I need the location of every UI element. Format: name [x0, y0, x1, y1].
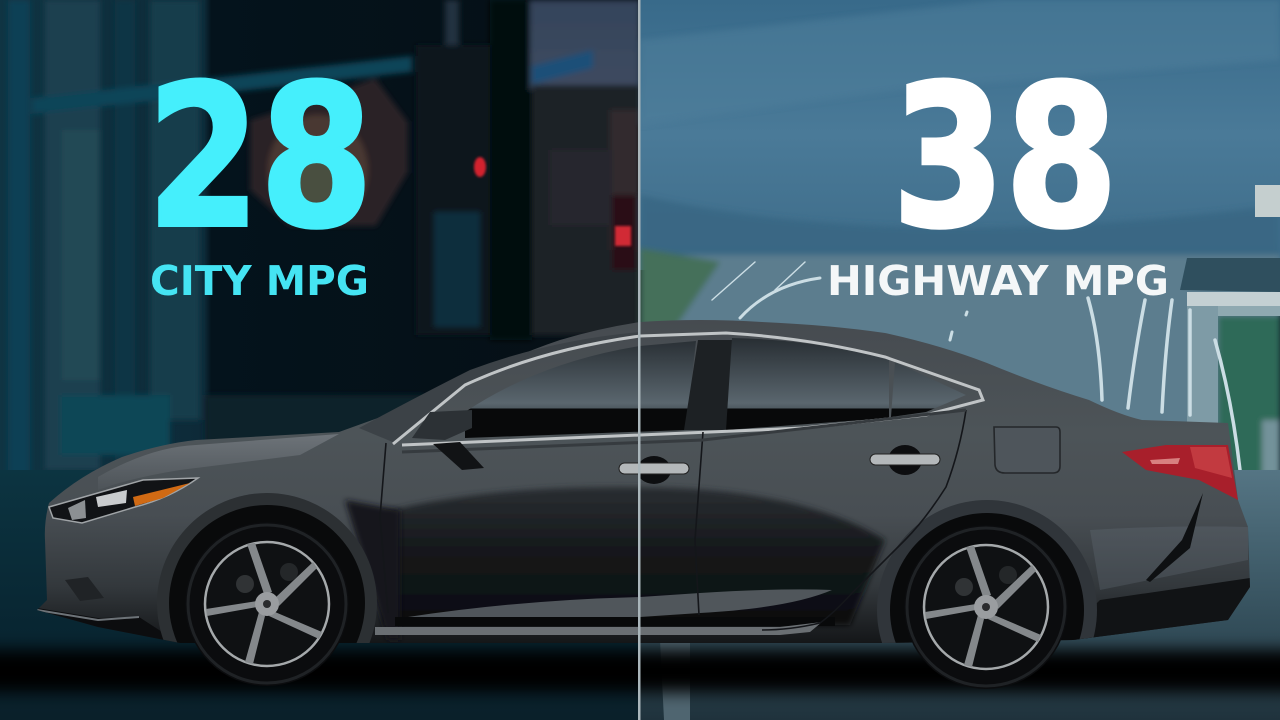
stat: city	[147, 44, 373, 305]
front wheel	[185, 522, 349, 686]
rear lower bumper	[1080, 578, 1250, 640]
divider line	[638, 0, 640, 720]
car body	[37, 320, 1250, 643]
sill stripe	[375, 622, 822, 635]
panel: highway background	[640, 0, 1280, 560]
panel: city background	[0, 0, 640, 720]
rear wheel	[904, 525, 1068, 689]
stop sign	[250, 78, 408, 226]
wheel arches	[158, 493, 377, 643]
label: city mpg: CITY MPG	[150, 257, 369, 305]
fuel door	[994, 427, 1060, 473]
quarter window	[891, 362, 966, 417]
traffic light housing	[416, 45, 492, 335]
rear door window	[726, 338, 889, 430]
headlight	[49, 478, 198, 523]
fender shadow	[345, 500, 400, 640]
black sill gap	[395, 617, 835, 626]
rear crease	[1146, 493, 1203, 582]
door lines	[380, 410, 966, 630]
hood highlight	[98, 434, 338, 482]
rocker highlight	[408, 589, 832, 617]
belt trim	[402, 410, 966, 452]
overpass	[1180, 258, 1280, 292]
windshield	[359, 332, 640, 443]
window chrome	[393, 333, 983, 445]
overhead beam	[32, 56, 412, 114]
car	[37, 320, 1250, 720]
tail light	[1122, 445, 1238, 500]
mirror shadow	[433, 442, 484, 470]
label: highway mpg: HIGHWAY MPG	[827, 257, 1169, 305]
stat: highway	[827, 44, 1169, 305]
front door window	[465, 341, 696, 438]
rear door handle	[870, 445, 940, 475]
front lower bumper	[38, 608, 164, 640]
road	[0, 470, 1280, 720]
mirror	[412, 410, 472, 440]
number: 28: 28	[147, 44, 373, 272]
B pillar	[684, 340, 733, 430]
door shadow	[384, 487, 885, 625]
fog lamp	[65, 577, 104, 601]
road centre marking	[660, 640, 690, 720]
car shadow	[0, 650, 1280, 692]
number: 38: 38	[892, 44, 1118, 272]
front door handle	[619, 456, 689, 484]
